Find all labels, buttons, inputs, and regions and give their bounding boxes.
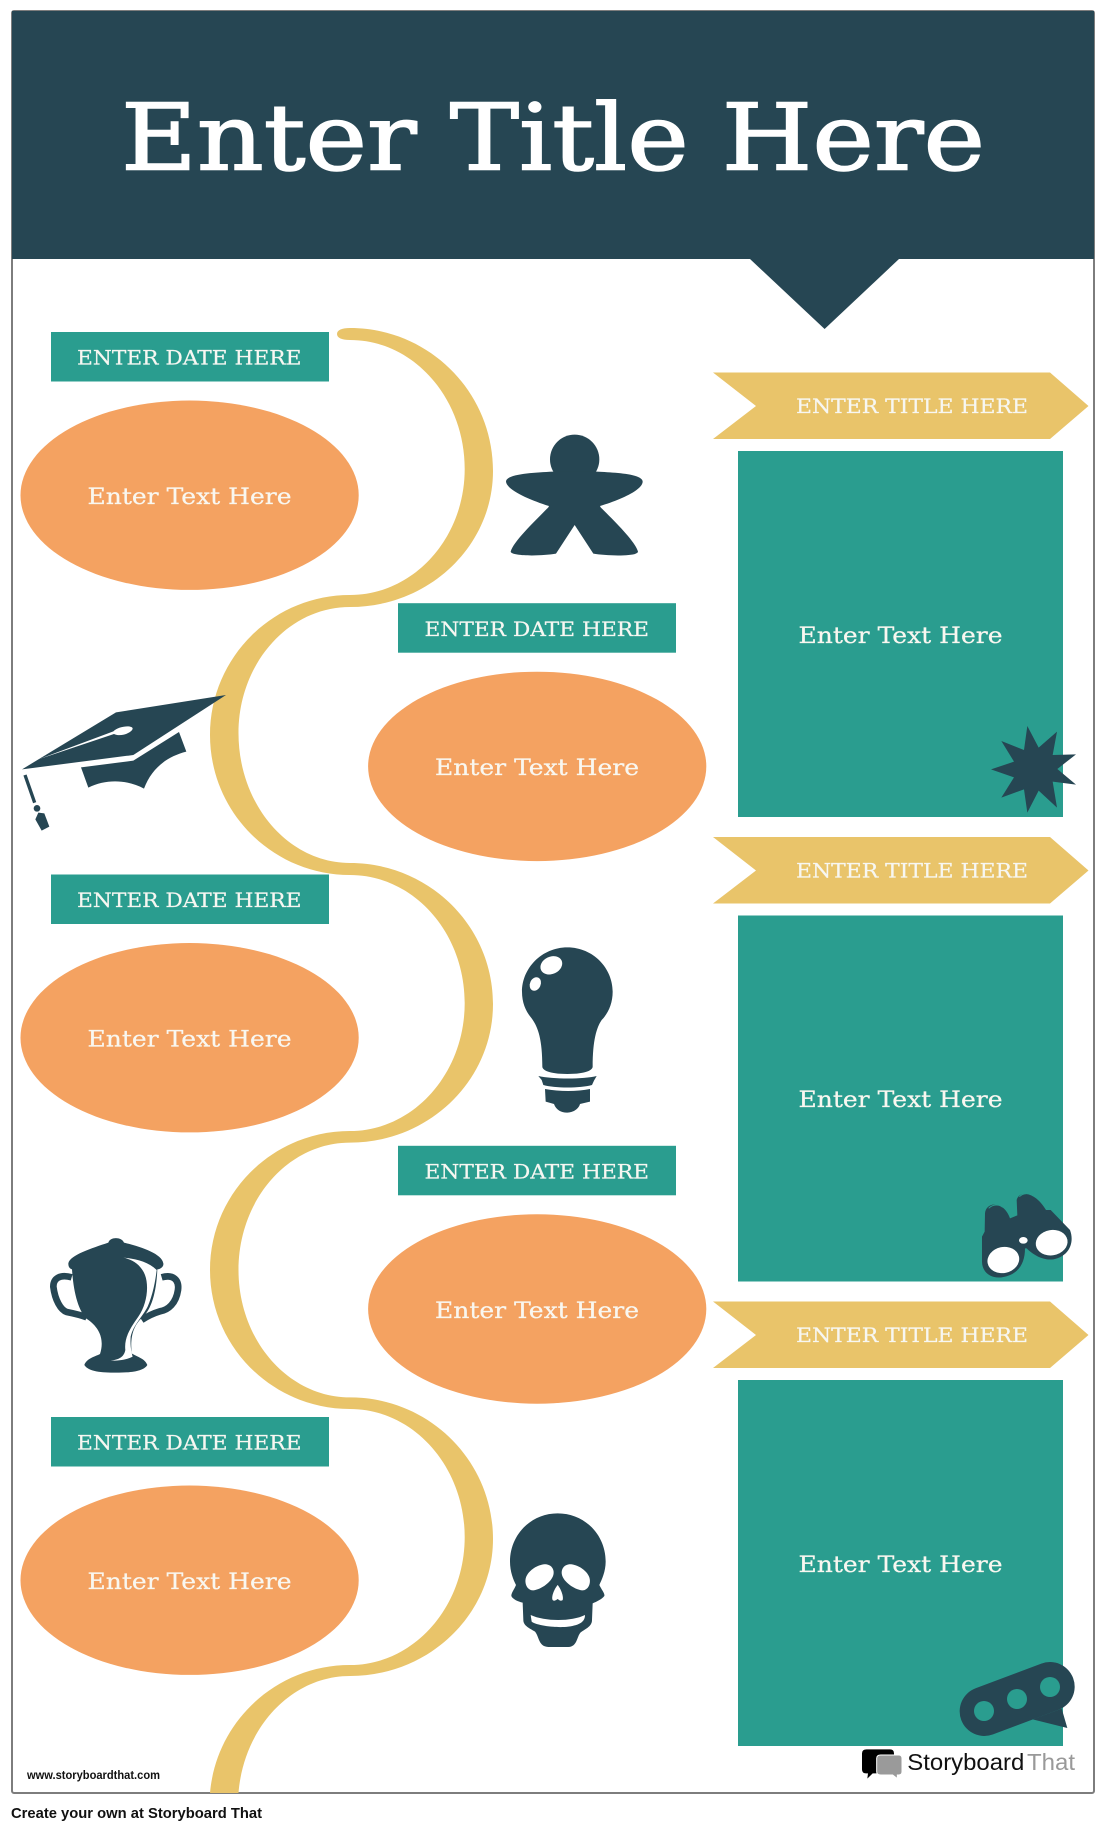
footer credit: Create your own at Storyboard That bbox=[11, 1805, 262, 1822]
timeline entry 4 bbox=[368, 1146, 706, 1404]
text ellipse 3 bbox=[20, 943, 359, 1132]
winding timeline curve bbox=[210, 328, 493, 1805]
text ellipse 4 bbox=[368, 1214, 706, 1404]
logo wordmark: That bbox=[1027, 1749, 1076, 1775]
website label: www.storyboardthat.com bbox=[26, 1768, 160, 1782]
timeline entry 5 bbox=[20, 1417, 359, 1675]
logo wordmark: Storyboard bbox=[907, 1749, 1024, 1775]
text ellipse 5 bbox=[20, 1486, 359, 1675]
date label 5 bbox=[51, 1417, 329, 1466]
icon: graduation cap bbox=[22, 695, 226, 831]
icon: speech bubble with dots bbox=[974, 1677, 1067, 1728]
text ellipse 2: Enter Text Here bbox=[435, 756, 639, 781]
icon: light bulb bbox=[522, 947, 613, 1113]
teal text panel 1 bbox=[738, 451, 1063, 817]
icon: skull bbox=[510, 1513, 606, 1647]
text ellipse 3: Enter Text Here bbox=[88, 1028, 292, 1052]
right column section 3 bbox=[713, 1302, 1088, 1746]
teal text panel 3: Enter Text Here bbox=[798, 1553, 1002, 1578]
teal text panel 2: Enter Text Here bbox=[798, 1088, 1002, 1113]
date label 3 bbox=[51, 874, 329, 924]
text ellipse 5: Enter Text Here bbox=[88, 1570, 292, 1595]
icon: starburst bbox=[991, 726, 1076, 813]
teal text panel 2 bbox=[738, 916, 1063, 1282]
ribbon heading 2 bbox=[713, 837, 1088, 904]
date label 4 bbox=[398, 1146, 676, 1195]
text ellipse 1 bbox=[20, 400, 359, 590]
date label 2: ENTER DATE HERE bbox=[424, 617, 649, 641]
icon: meeple bbox=[506, 435, 643, 555]
ribbon heading 3 bbox=[713, 1302, 1088, 1368]
date label 2 bbox=[398, 603, 676, 653]
text ellipse 2 bbox=[368, 672, 706, 861]
date label 1 bbox=[51, 332, 329, 382]
Storyboard That logo bbox=[862, 1749, 1076, 1779]
ribbon heading 3: ENTER TITLE HERE bbox=[796, 1323, 1028, 1347]
date label 1: ENTER DATE HERE bbox=[77, 346, 302, 370]
icon: binoculars bbox=[982, 1194, 1072, 1277]
timeline entry 2 bbox=[368, 603, 706, 861]
right column section 1 bbox=[713, 372, 1088, 817]
ribbon heading 2: ENTER TITLE HERE bbox=[796, 858, 1028, 882]
timeline entry 3 bbox=[20, 874, 359, 1132]
logo icon: chat bubbles bbox=[862, 1749, 902, 1779]
text ellipse 4: Enter Text Here bbox=[435, 1299, 639, 1324]
right column section 2 bbox=[713, 837, 1088, 1282]
title: Enter Title Here bbox=[121, 84, 985, 192]
date label 5: ENTER DATE HERE bbox=[77, 1431, 302, 1455]
ribbon heading 1: ENTER TITLE HERE bbox=[796, 394, 1028, 418]
header banner bbox=[12, 11, 1094, 329]
timeline entry 1 bbox=[20, 332, 359, 590]
teal text panel 1: Enter Text Here bbox=[798, 624, 1002, 649]
ribbon heading 1 bbox=[713, 372, 1088, 439]
icon: trophy bbox=[53, 1238, 178, 1373]
date label 4: ENTER DATE HERE bbox=[424, 1159, 649, 1183]
text ellipse 1: Enter Text Here bbox=[88, 485, 292, 510]
date label 3: ENTER DATE HERE bbox=[77, 888, 302, 912]
teal text panel 3 bbox=[738, 1380, 1063, 1746]
